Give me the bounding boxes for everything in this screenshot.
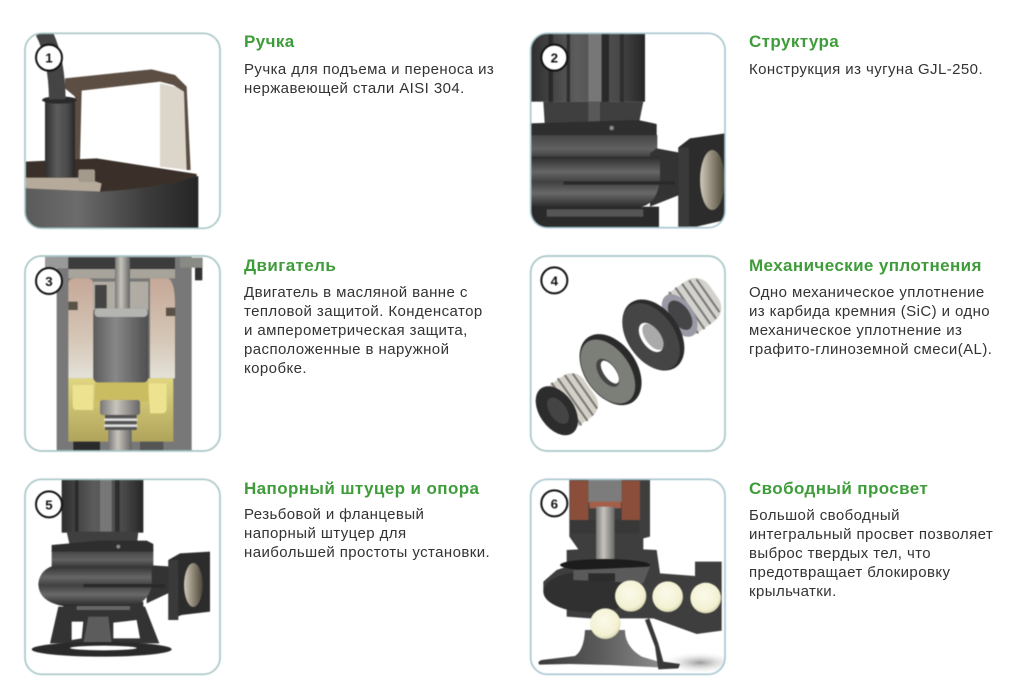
description [749, 284, 992, 358]
description: напорный штуцер для [244, 525, 406, 542]
description: Двигатель в масляной ванне с [244, 284, 468, 301]
description: тепловой защитой. Конденсатор [244, 303, 483, 320]
frame [531, 33, 725, 228]
badge 6: 6 [551, 496, 558, 511]
badge 4: 4 [551, 273, 559, 288]
panel: free passage [529, 478, 993, 676]
heading: Ручка [244, 32, 295, 51]
badge 1: 1 [45, 51, 53, 66]
heading: Свободный просвет [749, 479, 928, 498]
description [244, 61, 494, 97]
right seal [654, 271, 728, 344]
heading: Структура [749, 32, 839, 51]
grey disc [567, 322, 654, 417]
panel: motor [24, 254, 483, 452]
heading: Двигатель [244, 256, 336, 275]
heading: Напорный штуцер и опора [244, 479, 479, 498]
frame [25, 33, 220, 228]
illustration: pump with stand [24, 478, 222, 676]
description: расположенные в наружной [244, 341, 449, 358]
badge 2 [541, 45, 567, 71]
description: Одно механическое уплотнение [749, 284, 985, 301]
description: выброс твердых тел, что [749, 545, 931, 562]
panel: structure [529, 32, 983, 229]
description: наибольшей простоты установки. [244, 544, 490, 561]
illustration: free passage cutaway [529, 478, 726, 676]
badge 3 [36, 268, 62, 294]
badge 5 [36, 491, 62, 517]
illustration: pump handle [24, 32, 222, 230]
description: графито-глиноземной смеси(AL). [749, 341, 992, 358]
badge 3: 3 [45, 274, 53, 289]
description: из карбида кремния (SiC) и одно [749, 303, 990, 320]
description: и амперометрическая защита, [244, 322, 468, 339]
badge 5: 5 [45, 497, 53, 512]
frame [25, 256, 220, 451]
description: коробке. [244, 360, 307, 377]
description: Ручка для подъема и переноса из [244, 61, 494, 78]
description: Резьбовой и фланцевый [244, 506, 424, 523]
description: Конструкция из чугуна GJL-250. [749, 61, 983, 78]
frame [531, 256, 725, 451]
description: интегральный просвет позволяет [749, 526, 993, 543]
badge 4 [541, 267, 567, 293]
badge 6 [541, 490, 567, 516]
badge 2: 2 [551, 51, 558, 66]
panel: handle [24, 32, 494, 230]
description: Большой свободный [749, 507, 900, 524]
heading: Механические уплотнения [749, 256, 982, 275]
description: нержавеющей стали AISI 304. [244, 80, 465, 97]
frame [25, 479, 220, 674]
dark disc [609, 288, 697, 382]
description: механическое уплотнение из [749, 322, 962, 339]
illustration: seals [529, 254, 726, 452]
description: крыльчатки. [749, 583, 837, 600]
panel: mechanical seals [529, 254, 992, 452]
badge 1 [36, 45, 62, 71]
illustration: pump casing [529, 32, 726, 229]
panel: discharge and support [24, 478, 490, 676]
frame [531, 479, 725, 674]
description [749, 507, 993, 600]
illustration: motor cutaway [24, 254, 222, 452]
description [244, 506, 490, 561]
description [244, 284, 483, 377]
description: предотвращает блокировку [749, 564, 950, 581]
left seal [527, 365, 605, 443]
